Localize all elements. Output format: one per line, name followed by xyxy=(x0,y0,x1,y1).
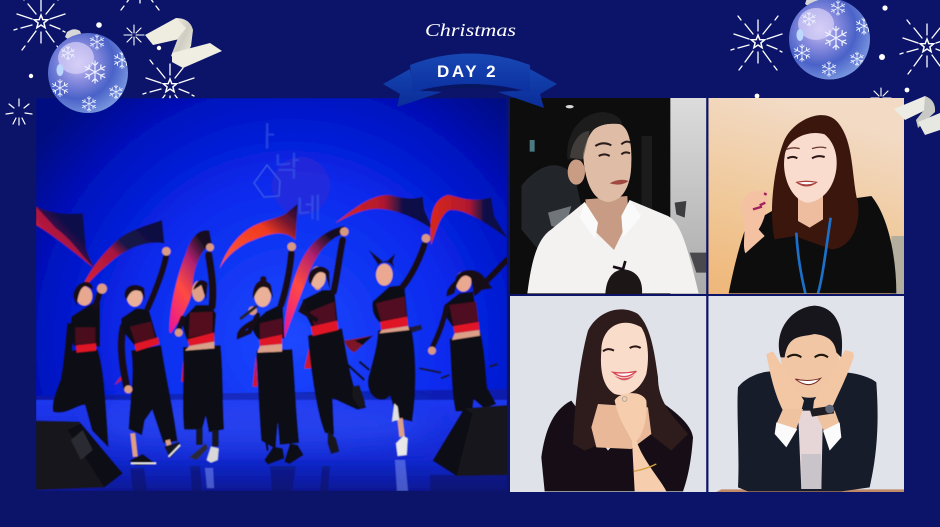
dancer 5 xyxy=(301,227,369,454)
scarves xyxy=(36,195,508,387)
stage backdrop watermark: 네 xyxy=(296,193,322,224)
speakers xyxy=(36,405,508,490)
portrait: smiling woman, hand under chin xyxy=(510,296,706,492)
decoration: left starbursts xyxy=(6,0,194,125)
dancer 4 xyxy=(239,242,304,465)
dancer 6 xyxy=(369,234,430,456)
stage backdrop watermark xyxy=(254,121,330,224)
banner: day 2 ribbon xyxy=(383,54,557,108)
title: Christmas: Christmas xyxy=(425,20,516,40)
stage backdrop watermark: ㅏ xyxy=(255,121,281,152)
dancer 7 xyxy=(419,260,507,410)
dancers and scarves, drawn in zoomed coordinates xyxy=(36,195,508,490)
ribbon: left cream xyxy=(145,18,222,68)
stage backdrop watermark: 낙 xyxy=(274,151,300,182)
dancer 2 xyxy=(121,247,180,465)
portrait: woman with lanyard on peach background xyxy=(708,98,904,294)
photo: dance troupe on blue stage xyxy=(36,98,508,491)
portrait: man in suit, hands framing face xyxy=(708,296,904,492)
ribbon: right cream xyxy=(894,96,940,135)
dancer 1 xyxy=(54,282,107,444)
portrait: man in white shirt xyxy=(510,98,706,294)
ornament: right bauble xyxy=(789,0,872,80)
heading: DAY 2: DAY 2 xyxy=(437,62,498,81)
dancer 3 xyxy=(175,243,223,463)
decoration: right starbursts xyxy=(731,5,940,108)
stage floor xyxy=(36,389,507,491)
ornament: left bauble xyxy=(48,29,130,113)
